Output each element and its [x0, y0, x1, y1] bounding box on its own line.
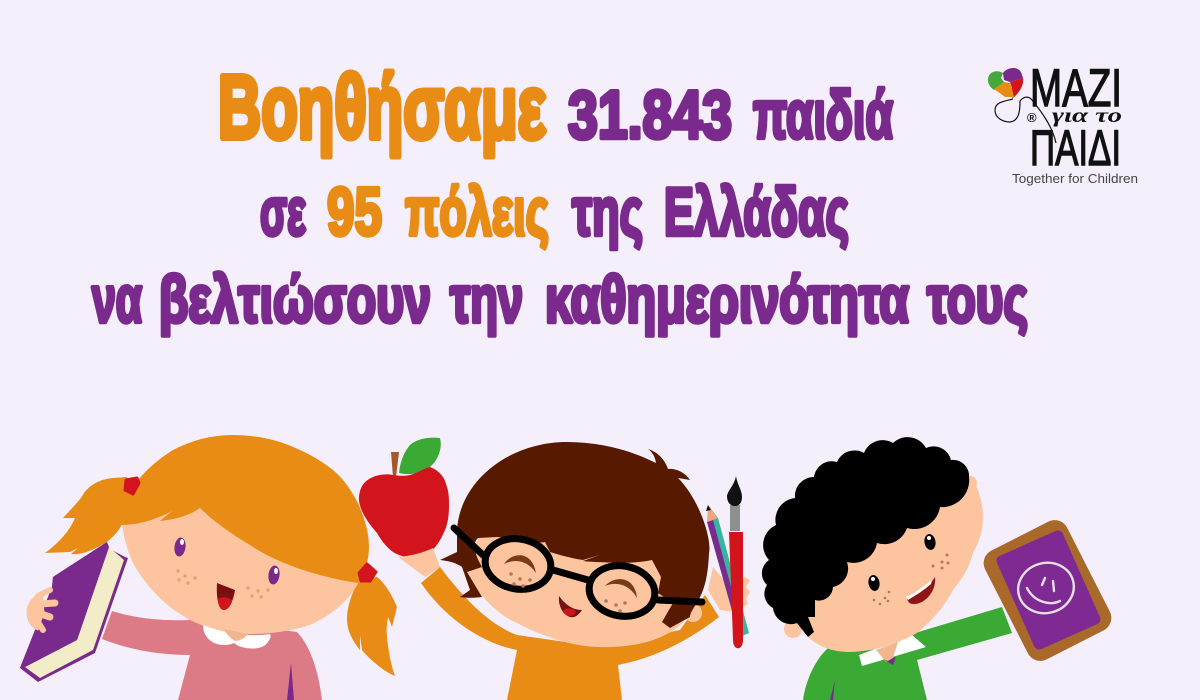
logo: Mazi gia to Paidi	[988, 59, 1138, 186]
heading line 3: την	[450, 262, 523, 336]
boy collar	[859, 635, 926, 666]
heading line 3: καθημερινότητα	[545, 262, 909, 336]
boy right hand	[708, 567, 750, 612]
boy mouth	[559, 596, 582, 617]
girl eyes	[173, 537, 281, 585]
eyes	[867, 533, 937, 592]
logo script: gia to: για το	[1052, 105, 1122, 127]
heading line 2: 95	[327, 174, 382, 250]
boy freckles	[509, 572, 627, 613]
logo wordmark: PAIDI: ΠΑΙΔΙ	[1030, 120, 1121, 176]
boy face	[463, 510, 695, 647]
heading line 3: βελτιώσουν	[159, 262, 431, 336]
illustration: girl with book	[20, 435, 397, 700]
girl hand	[27, 590, 55, 630]
neck	[224, 629, 248, 641]
girl face	[122, 500, 361, 634]
logo wordmark: MAZI: ΜΑΖΙ	[1030, 59, 1122, 118]
heading line 3: τους	[927, 262, 1028, 336]
V-neck trim	[883, 657, 896, 665]
girl freckles	[176, 569, 270, 599]
sweater fold	[830, 680, 835, 700]
right ear	[963, 476, 977, 490]
chalk smiley	[1012, 557, 1080, 619]
girl collar	[203, 625, 271, 649]
apple leaf	[399, 438, 441, 474]
apple stem	[391, 452, 399, 477]
slate purple surface	[995, 529, 1102, 651]
pencil	[706, 505, 749, 640]
heading line 2: πόλεις	[405, 174, 549, 250]
illustration: curly-haired boy with slate	[762, 437, 1116, 700]
girl hair	[122, 435, 369, 583]
icon: puzzle heart balloon	[988, 68, 1056, 143]
heading line 3: να	[92, 262, 142, 336]
boy glasses	[454, 528, 702, 621]
heading line 2: Ελλάδας	[664, 174, 849, 250]
sweater sleeve shadow	[287, 663, 294, 700]
boy ear	[684, 604, 702, 622]
left ear	[784, 620, 802, 638]
hair ties	[125, 478, 376, 581]
slate board	[979, 515, 1116, 666]
title: headline text	[92, 58, 1028, 336]
apple body	[359, 467, 449, 557]
freckles	[873, 554, 950, 605]
illustration: boy with glasses	[398, 442, 750, 700]
boy hair	[440, 442, 709, 628]
boy hand holding apple	[398, 548, 440, 577]
heading line 2	[260, 174, 849, 250]
logo tagline: Together for Children	[1012, 172, 1138, 186]
girl mouth	[217, 583, 235, 610]
logo registered mark: ®	[1027, 110, 1037, 125]
left pigtail	[45, 477, 132, 554]
boy sweater and arms	[421, 567, 719, 700]
slate wood frame	[979, 515, 1116, 666]
heading line 1: παιδιά	[753, 77, 893, 153]
heading line 3	[92, 262, 1028, 336]
mouth	[906, 577, 935, 604]
heading line 1: Βοηθήσαμε	[218, 58, 546, 158]
girl sweater and arm	[102, 611, 322, 700]
right pigtail	[347, 577, 397, 676]
illustration: apple	[359, 438, 449, 557]
heading line 2: σε	[260, 174, 306, 250]
paintbrush	[727, 476, 743, 648]
face	[790, 480, 983, 652]
boy closed eyes	[504, 555, 637, 598]
book	[20, 542, 128, 682]
boy green sweater and arm	[803, 607, 1012, 700]
heading line 2: της	[572, 174, 643, 250]
neck and V-neck	[876, 642, 898, 662]
curly hair	[762, 437, 969, 637]
heading line 1: 31.843	[568, 77, 732, 153]
